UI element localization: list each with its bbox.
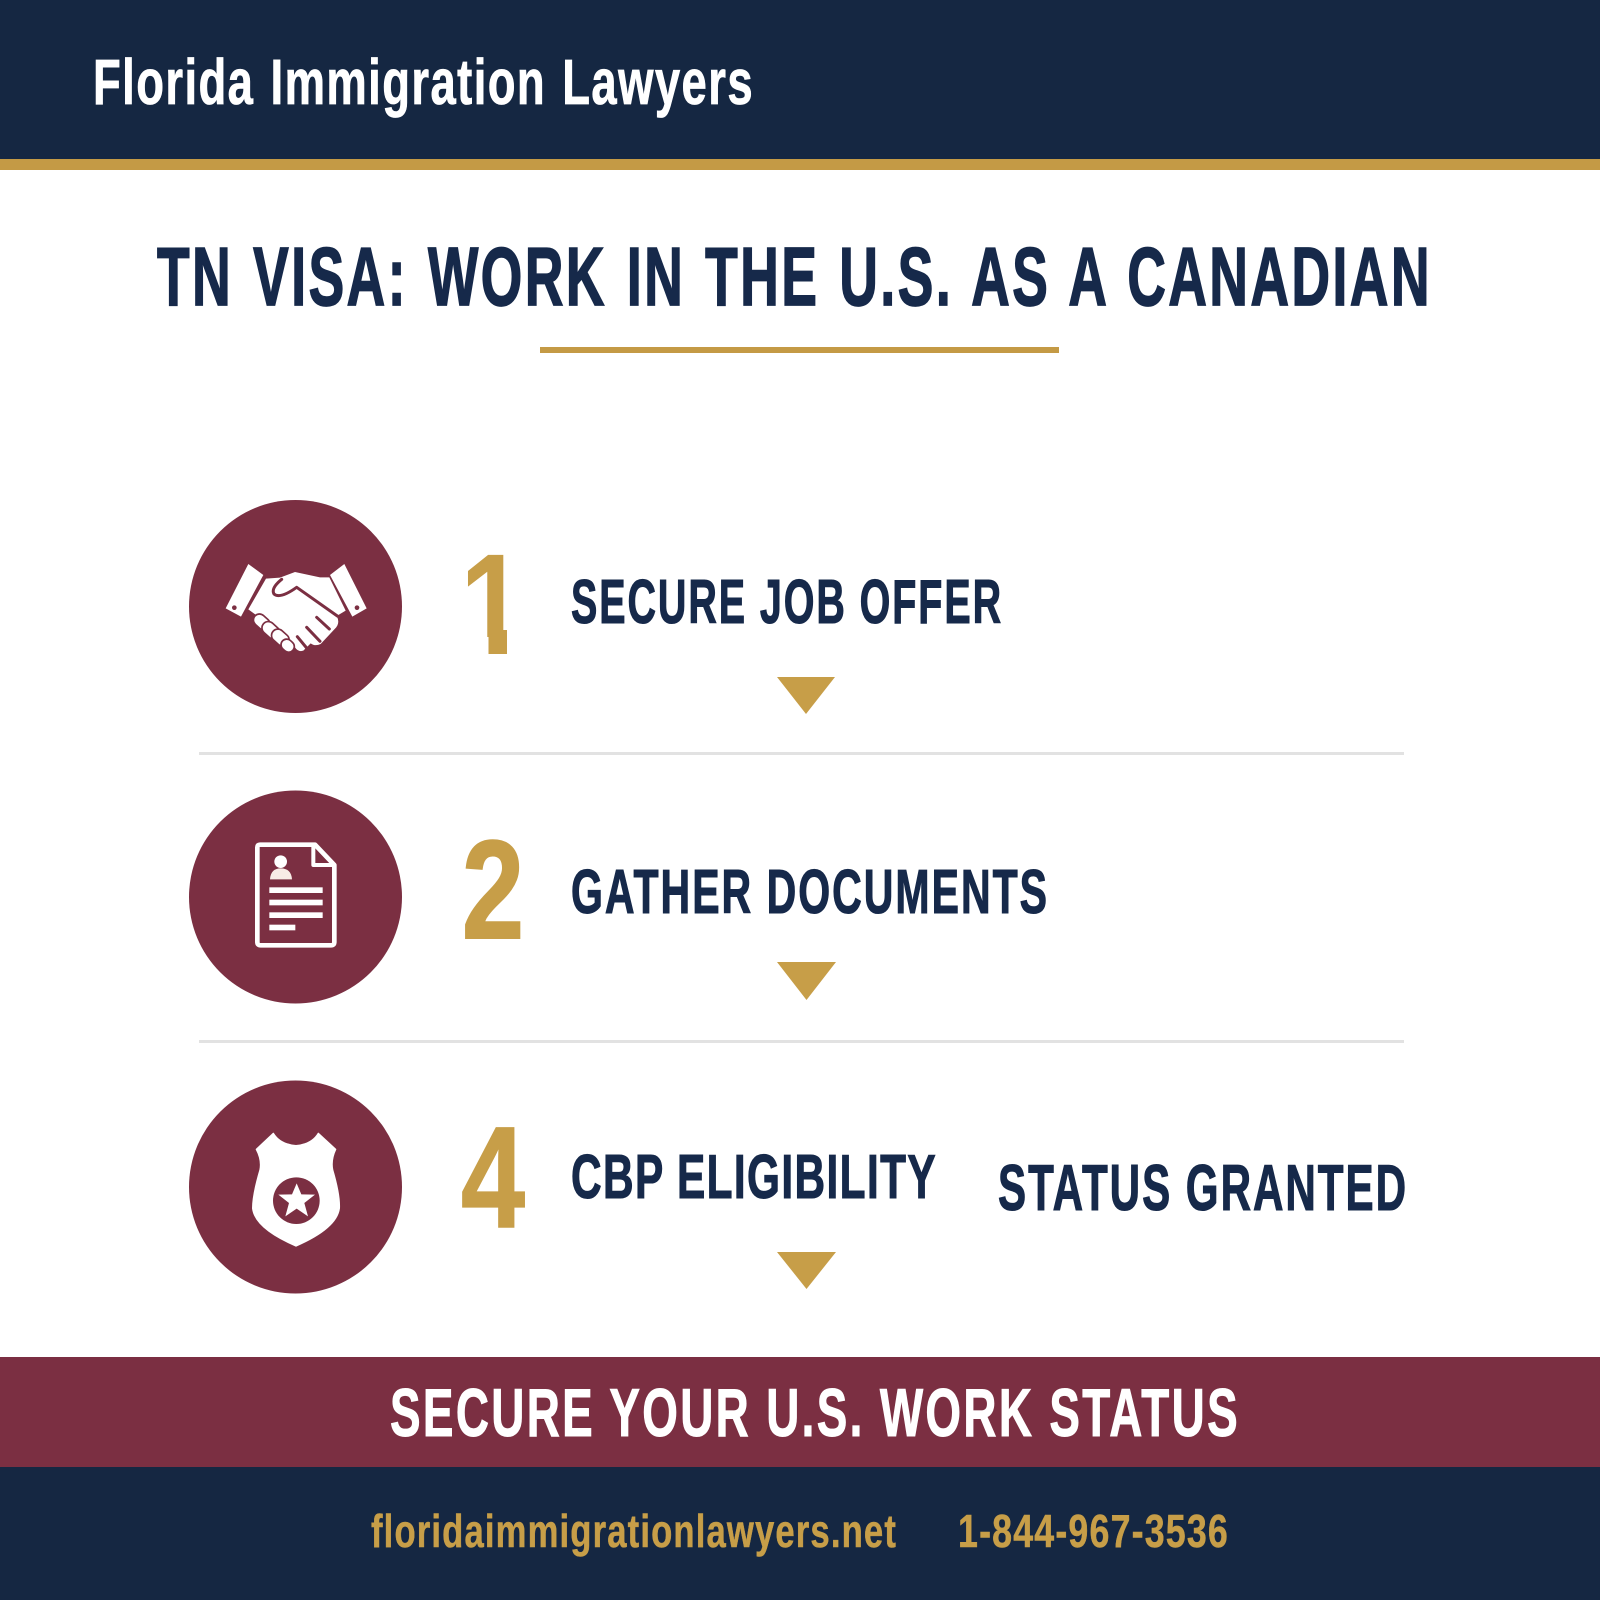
- icon: document: [189, 790, 402, 1004]
- header band: [0, 0, 1600, 170]
- step 1: [189, 500, 1003, 714]
- icon: badge: [189, 1080, 402, 1294]
- title underline: [540, 347, 1059, 353]
- step label: gather documents: GATHER DOCUMENTS: [571, 858, 1049, 927]
- icon: handshake: [189, 500, 402, 713]
- step number 2: 2: [462, 811, 524, 968]
- step label: secure job offer: SECURE JOB OFFER: [571, 568, 1003, 637]
- step number 1: 1: [460, 524, 525, 685]
- header firm name: Florida Immigration Lawyers: [93, 46, 754, 118]
- arrow down: [777, 962, 836, 1000]
- website: floridaimmigrationlawyers.net: [371, 1505, 897, 1557]
- arrow down: [777, 677, 835, 714]
- step 2: [189, 790, 1049, 1004]
- step 4: [189, 1080, 1408, 1294]
- arrow down: [777, 1252, 836, 1289]
- call to action band: [0, 1357, 1600, 1467]
- footer band: [0, 1467, 1600, 1600]
- step label: cbp eligibility: CBP ELIGIBILITY: [571, 1143, 937, 1212]
- step number 1: [468, 554, 507, 654]
- step number 4: 4: [461, 1097, 525, 1258]
- phone number: 1-844-967-3536: [958, 1505, 1229, 1557]
